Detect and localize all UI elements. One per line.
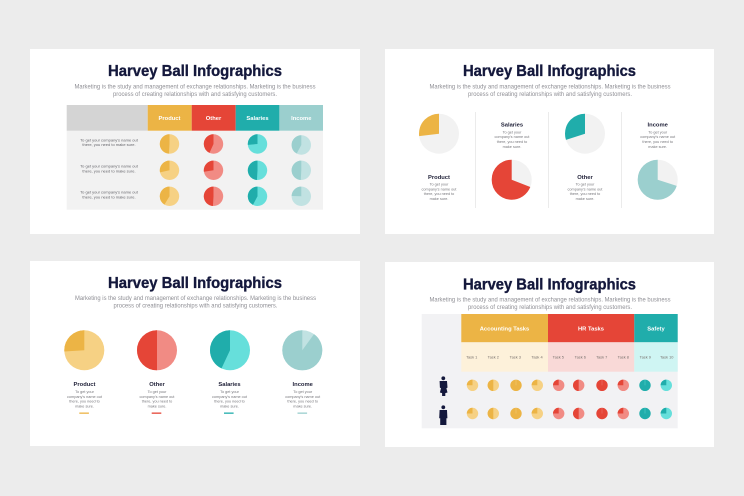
subtitle xyxy=(75,295,316,309)
header: safety: Safety xyxy=(647,326,665,332)
row label 3 xyxy=(80,190,139,200)
label: product: there, you need to xyxy=(424,192,454,196)
ball: task 6 xyxy=(573,380,584,391)
label: income xyxy=(285,382,321,408)
ball: task 1 xyxy=(467,380,478,391)
label: other: company's name out xyxy=(140,395,175,399)
header: Product: Product xyxy=(159,116,181,122)
row label 1: To get your company's name out xyxy=(80,137,139,142)
subtitle xyxy=(430,84,670,98)
label: product: make sure. xyxy=(430,197,448,201)
ball: other row 2 xyxy=(204,161,223,180)
subtitle: process of creating relationships with and satisfying customers. xyxy=(468,304,632,311)
panel: staggered pies with dividers xyxy=(385,49,714,234)
ball: task 7 xyxy=(596,380,608,391)
header: HR tasks xyxy=(548,314,634,342)
ball: task 9 xyxy=(639,408,651,419)
pie: salaries xyxy=(210,330,250,370)
ball: product row 1 xyxy=(160,134,179,154)
table background xyxy=(422,314,678,428)
accent bar: income xyxy=(298,412,307,414)
ball: task 4 xyxy=(532,380,543,391)
panel: task matrix xyxy=(385,262,714,447)
task cells: accounting: Task 1 xyxy=(466,355,477,360)
accent bar: salaries xyxy=(224,412,234,414)
pie: product xyxy=(419,114,459,154)
ball row 1 xyxy=(467,380,672,391)
pie: income xyxy=(282,330,322,370)
ball: task 2 xyxy=(488,380,499,391)
label: salaries: To get your xyxy=(220,390,240,394)
task cells: HR: Task 8 xyxy=(618,355,629,360)
task cells: HR: Task 7 xyxy=(596,355,607,360)
subtitle: Marketing is the study and management of exchange relationships. Marketing is the business xyxy=(430,84,670,90)
ball: task 6 xyxy=(573,408,584,419)
ball: task 3 xyxy=(510,408,522,419)
label: income: make sure. xyxy=(293,404,312,408)
ball: task 5 xyxy=(553,380,564,391)
header: Salaries xyxy=(236,105,279,131)
label: salaries: company's name out xyxy=(495,135,530,139)
label: product: company's name out xyxy=(67,395,103,399)
ball: income row 1 xyxy=(292,135,311,155)
icon: person 1 xyxy=(440,376,448,396)
ball: other row 1 xyxy=(204,134,223,154)
label: income: Income xyxy=(293,382,314,388)
ball row 2 xyxy=(467,408,672,419)
ball: income row 3 xyxy=(292,187,311,206)
task cells: accounting: Task 4 xyxy=(531,355,543,360)
label: other: there, you need to xyxy=(142,400,172,404)
label: income: To get your xyxy=(293,390,313,394)
header: safety xyxy=(634,314,678,342)
title: Harvey Ball Infographics xyxy=(108,275,282,292)
label: other xyxy=(568,175,603,201)
label: salaries: there, you need to xyxy=(214,400,245,404)
panel: table of Harvey balls xyxy=(30,49,360,234)
label: salaries: company's name out xyxy=(212,395,248,399)
label: product: To get your xyxy=(430,183,449,187)
task cells: HR: Task 6 xyxy=(575,355,586,360)
ball: task 3 xyxy=(510,380,522,391)
label: salaries: make sure. xyxy=(220,404,239,408)
subtitle: process of creating relationships with and satisfying customers. xyxy=(114,302,278,309)
pie: other xyxy=(565,114,605,154)
label: salaries xyxy=(495,122,530,149)
ball: task 10 xyxy=(661,408,672,419)
subtitle: process of creating relationships with and satisfying customers. xyxy=(468,91,632,98)
table header blank cell xyxy=(67,105,148,131)
pie: salaries xyxy=(492,160,532,200)
task cells: accounting xyxy=(461,342,548,372)
label: other xyxy=(140,382,175,408)
ball: product row 2 xyxy=(160,161,179,180)
label: salaries: Salaries xyxy=(218,382,241,388)
task cells: accounting: Task 3 xyxy=(510,355,521,360)
label: other: make sure. xyxy=(148,404,166,408)
label: other: To get your xyxy=(576,183,595,187)
label: product: Product xyxy=(74,382,96,388)
label: income: there, you need to xyxy=(287,400,318,404)
ball: task 1 xyxy=(467,408,478,419)
label: salaries xyxy=(212,382,248,408)
pie: other xyxy=(137,330,177,370)
ball: task 4 xyxy=(532,408,543,419)
task cells: safety: Task 10 xyxy=(660,355,674,360)
task cells: HR xyxy=(548,342,634,372)
header: accounting tasks: Accounting Tasks xyxy=(480,326,529,332)
ball: salaries row 1 xyxy=(248,134,267,154)
label: income: Income xyxy=(648,122,669,128)
subtitle xyxy=(430,296,670,311)
pie: income xyxy=(638,160,678,200)
row label 3: there, you need to make sure. xyxy=(82,195,136,200)
task cells: safety xyxy=(634,342,678,372)
task cells: safety: Task 9 xyxy=(640,355,651,360)
label: income: company's name out xyxy=(285,395,321,399)
label: product: Product xyxy=(428,175,450,181)
row label 1: there, you need to make sure. xyxy=(82,142,136,147)
label: other: make sure. xyxy=(576,197,594,201)
icon: person 2 xyxy=(439,405,447,425)
ball: other row 3 xyxy=(204,187,223,206)
ball: task 7 xyxy=(596,408,608,419)
panel: four large pies xyxy=(30,261,360,446)
ball: income row 2 xyxy=(292,161,311,180)
label: income: company's name out xyxy=(640,135,676,139)
label: income: To get your xyxy=(648,130,668,134)
label: product: To get your xyxy=(75,390,95,394)
ball: task 10 xyxy=(661,380,672,391)
ball: salaries row 2 xyxy=(248,161,267,180)
subtitle: Marketing is the study and management of exchange relationships. Marketing is the business xyxy=(430,296,670,304)
subtitle: Marketing is the study and management of exchange relationships. Marketing is the business xyxy=(74,84,316,90)
row label 2: there, you need to make sure. xyxy=(82,168,136,173)
row label 3: To get your company's name out xyxy=(80,190,139,195)
ball: product row 3 xyxy=(160,187,179,206)
label: other: Other xyxy=(577,175,593,181)
header: Product xyxy=(148,105,192,131)
subtitle: process of creating relationships with and satisfying customers. xyxy=(113,91,277,98)
label: product: make sure. xyxy=(75,404,94,408)
accent bar: product xyxy=(79,412,89,414)
label: salaries: there, you need to xyxy=(497,140,527,144)
label: other: Other xyxy=(149,382,165,388)
label: product: company's name out xyxy=(422,187,457,191)
ball: task 9 xyxy=(639,380,651,391)
label: salaries: Salaries xyxy=(501,122,523,128)
subtitle: Marketing is the study and management of exchange relationships. Marketing is the business xyxy=(75,295,316,302)
label: other: To get your xyxy=(148,390,167,394)
subtitle xyxy=(74,84,316,98)
label: income: make sure. xyxy=(648,145,667,149)
ball: task 5 xyxy=(553,408,564,419)
header: Salaries: Salaries xyxy=(246,116,269,122)
label: income xyxy=(640,122,676,149)
header: Income: Income xyxy=(291,116,312,122)
header: Other: Other xyxy=(206,116,222,122)
label: other: company's name out xyxy=(568,187,603,191)
ball: task 8 xyxy=(618,408,629,419)
title: Harvey Ball Infographics xyxy=(463,63,636,80)
label: income: there, you need to xyxy=(642,140,673,144)
label: product xyxy=(67,382,103,408)
label: product xyxy=(422,175,457,201)
label: salaries: make sure. xyxy=(503,145,521,149)
row label 1 xyxy=(80,137,139,147)
header: accounting tasks xyxy=(461,314,548,342)
header: HR tasks: HR Tasks xyxy=(578,326,604,332)
ball: task 8 xyxy=(618,380,629,391)
ball: salaries row 3 xyxy=(248,187,267,206)
label: other: there, you need to xyxy=(570,192,600,196)
label: product: there, you need to xyxy=(69,400,100,404)
table body background xyxy=(67,131,323,210)
title: Harvey Ball Infographics xyxy=(108,63,282,80)
title: Harvey Ball Infographics xyxy=(463,276,636,294)
task cells: accounting: Task 2 xyxy=(488,355,499,360)
header: Other xyxy=(192,105,236,131)
accent bar: other xyxy=(152,412,161,414)
row label 2: To get your company's name out xyxy=(80,164,139,168)
row label 2 xyxy=(80,164,139,173)
ball: task 2 xyxy=(488,408,499,419)
label: salaries: To get your xyxy=(503,130,522,134)
header: Income xyxy=(279,105,323,131)
pie: product xyxy=(64,330,104,370)
task cells: HR: Task 5 xyxy=(553,355,564,360)
